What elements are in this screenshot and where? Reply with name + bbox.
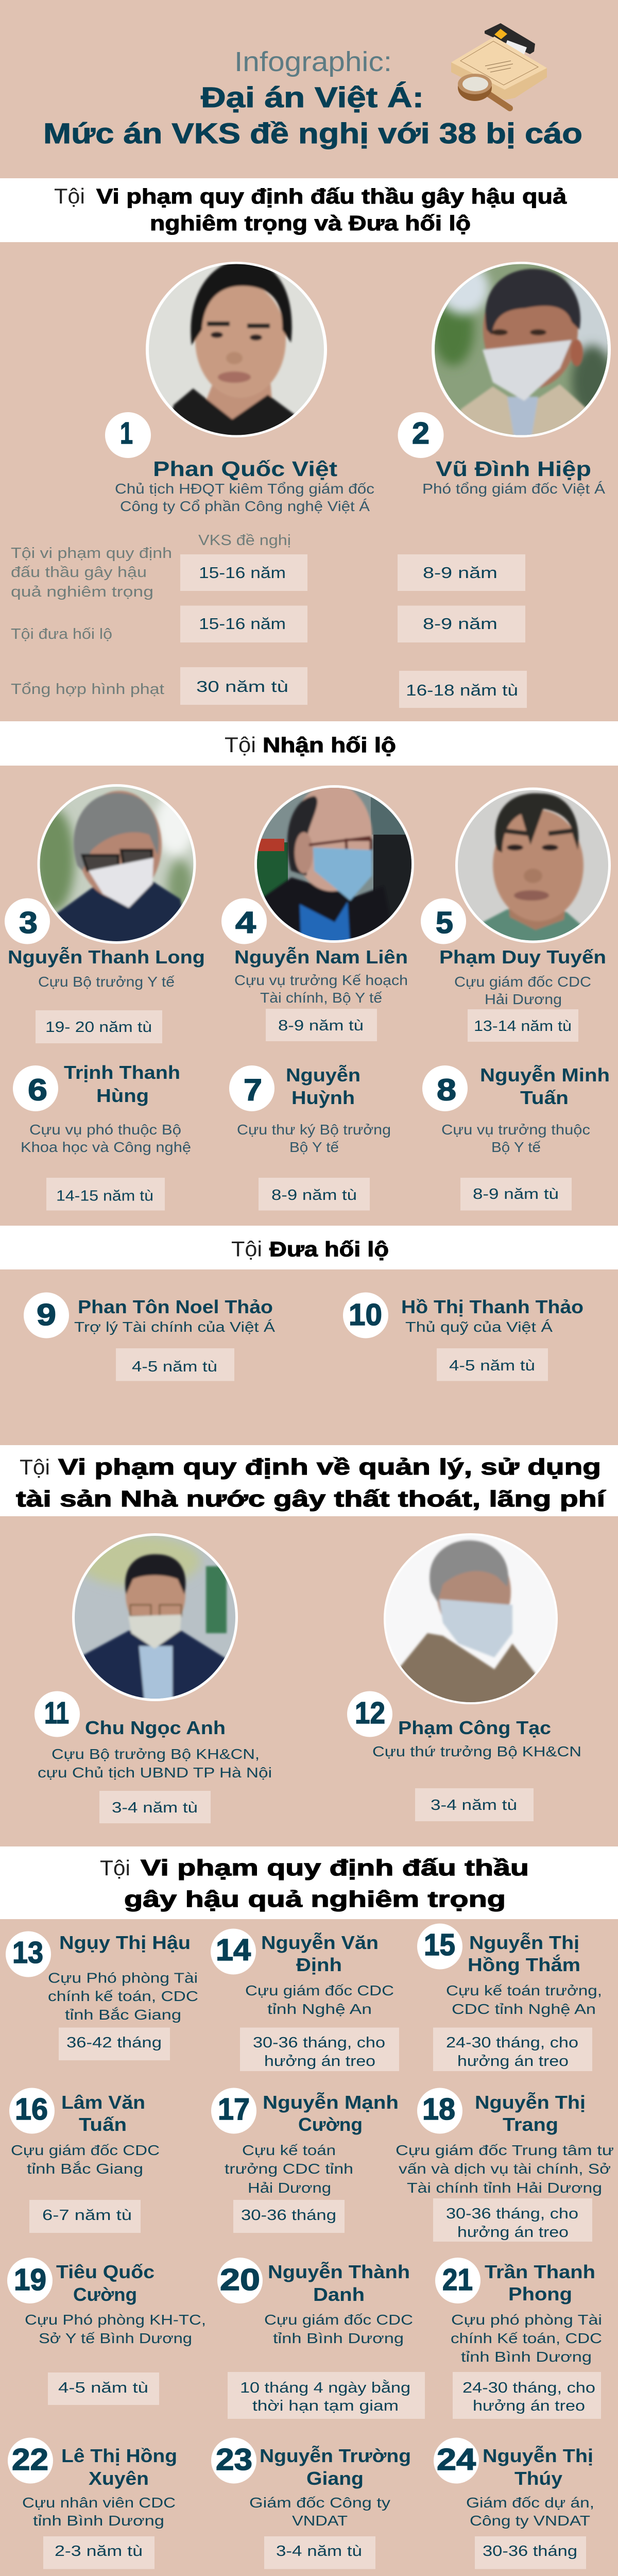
- section heading band: [0, 721, 618, 766]
- name: [61, 2445, 177, 2489]
- sentence box: [453, 2372, 601, 2419]
- section 5: bidding violation causing serious consequences: [0, 1846, 618, 2576]
- defendant 19: [7, 2258, 206, 2405]
- number badge 5: 5: [436, 906, 453, 940]
- number badge 8: [422, 1065, 468, 1111]
- name: [286, 1064, 360, 1108]
- sentence box: 4-5 năm tù: [449, 1358, 535, 1374]
- name: Danh: [313, 2284, 365, 2305]
- role: tỉnh Bình Dương: [273, 2330, 404, 2346]
- role: [446, 1982, 602, 2017]
- name: Hồ Thị Thanh Thảo: [401, 1296, 583, 1317]
- sentence box: 13-14 năm tù: [474, 1018, 572, 1035]
- number badge 8: 8: [437, 1073, 456, 1107]
- defendant 13: [6, 1931, 198, 2060]
- number badge 10: 10: [349, 1298, 382, 1332]
- number badge 15: [417, 1924, 462, 1969]
- section 4: state asset management violation: [0, 1445, 618, 1823]
- name: Trịnh Thanh: [64, 1062, 180, 1083]
- role: [21, 1122, 191, 1155]
- name: Tiêu Quốc: [56, 2261, 154, 2282]
- name: Ngụy Thị Hậu: [59, 1932, 191, 1953]
- row label: bidding violation: [11, 545, 172, 600]
- section heading band: [0, 1226, 618, 1269]
- section heading band: nghiêm trọng và Đưa hối lộ: [150, 211, 471, 235]
- role: Giám đốc Công ty: [249, 2495, 390, 2511]
- sentence box: [433, 2028, 592, 2071]
- number badge 13: 13: [12, 1936, 43, 1970]
- sentence box: [59, 2028, 170, 2060]
- name: [56, 2261, 154, 2305]
- defendant 5: [421, 787, 611, 1042]
- role: Công ty VNDAT: [470, 2513, 590, 2529]
- name: Vũ Đình Hiệp: [436, 457, 591, 481]
- sentence box: [43, 2536, 154, 2569]
- role: trưởng CDC tỉnh: [225, 2161, 353, 2177]
- role: tỉnh Nghệ An: [267, 2001, 372, 2017]
- name: Tuấn: [520, 1087, 569, 1108]
- defendant 17: [211, 2088, 399, 2233]
- defendant 8: [422, 1064, 610, 1211]
- name: Phong: [508, 2283, 572, 2304]
- section heading band: gây hậu quả nghiêm trọng: [124, 1887, 506, 1912]
- name: Thúy: [514, 2468, 562, 2489]
- number badge 16: [9, 2088, 55, 2134]
- role: cựu Chủ tịch UBND TP Hà Nội: [38, 1765, 272, 1781]
- role: [264, 2312, 413, 2346]
- sentence box: [399, 671, 527, 708]
- sentence box: 3-4 năm tù: [112, 1800, 198, 1816]
- role: [25, 2312, 206, 2346]
- number badge 21: [435, 2258, 480, 2303]
- number badge 21: 21: [442, 2263, 473, 2297]
- role: [396, 2142, 614, 2196]
- photo: Nguyễn Nam Liên: [254, 783, 415, 948]
- role: vấn và dịch vụ tài chính, Sở: [399, 2161, 611, 2177]
- defendant 22: [8, 2438, 177, 2569]
- sentence box: [264, 2536, 375, 2569]
- defendant 12: [347, 1533, 581, 1821]
- defendant 10: [343, 1292, 583, 1381]
- role: [48, 1970, 198, 2023]
- name: Phan Tôn Noel Thảo: [78, 1296, 273, 1317]
- number badge 12: 12: [355, 1696, 385, 1730]
- name: Tuấn: [79, 2114, 127, 2135]
- role: [441, 1122, 590, 1155]
- sentence box: 24-30 tháng, cho: [462, 2380, 595, 2396]
- defendant 15: [417, 1924, 602, 2071]
- name: Nguyễn Nam Liên: [234, 946, 408, 968]
- role: Bộ Y tế: [289, 1139, 339, 1155]
- role: Cựu giám đốc CDC: [264, 2312, 413, 2328]
- sentence box: [259, 1178, 370, 1211]
- name: Huỳnh: [291, 1087, 355, 1108]
- number badge 14: [211, 1929, 256, 1974]
- sentence box: 3-4 năm tù: [431, 1797, 517, 1814]
- role: Chủ tịch HĐQT kiêm Tổng giám đốc: [115, 481, 374, 497]
- title: Mức án VKS đề nghị với 38 bị cáo: [43, 117, 582, 149]
- sentence box: hưởng án treo: [473, 2398, 585, 2414]
- name: Phạm Duy Tuyến: [439, 946, 606, 968]
- role: Cựu giám đốc Trung tâm tư: [396, 2142, 614, 2158]
- sentence box: [29, 2200, 141, 2233]
- sentence box: [48, 2372, 159, 2405]
- role: Cựu giám đốc CDC: [454, 974, 591, 990]
- role: Cựu vụ trưởng thuộc: [441, 1122, 590, 1138]
- number badge 3: [5, 899, 50, 944]
- sentence box: [437, 1348, 548, 1381]
- defendant 24: [434, 2438, 594, 2569]
- row label: giving bribes: Tội đưa hối lộ: [11, 626, 112, 642]
- name: Nguyễn Thanh Long: [8, 946, 205, 968]
- number badge 11: 11: [44, 1696, 69, 1730]
- section heading band: Tội: [20, 1455, 50, 1479]
- sentence box: [99, 1791, 211, 1823]
- defendant 20: [217, 2258, 425, 2419]
- role: Cựu kế toán trưởng,: [446, 1982, 602, 1998]
- role: chính kế toán, CDC: [48, 1988, 198, 2004]
- number badge 18: 18: [422, 2092, 455, 2126]
- sentence box: 14-15 năm tù: [56, 1188, 153, 1205]
- section heading band: Đưa hối lộ: [269, 1238, 389, 1261]
- defendant 9: [24, 1292, 275, 1381]
- sentence box: 8-9 năm tù: [271, 1187, 357, 1204]
- sentence box: 4-5 năm tù: [58, 2380, 148, 2396]
- sentence box: hưởng án treo: [264, 2053, 375, 2070]
- row label: bidding violation: Tội vi phạm quy định: [11, 545, 172, 562]
- photo: Phạm Duy Tuyến: [455, 787, 611, 948]
- number badge 4: [221, 899, 267, 944]
- name: Lê Thị Hồng: [61, 2445, 177, 2466]
- sentence box: 10 tháng 4 ngày bằng: [240, 2379, 410, 2396]
- number badge 1: 1: [120, 416, 133, 450]
- role: Cựu giám đốc CDC: [245, 1982, 394, 1998]
- number badge 3: 3: [19, 906, 38, 940]
- section heading band: tài sản Nhà nước gây thất thoát, lãng phí: [16, 1486, 606, 1512]
- name: [61, 2092, 145, 2135]
- role: Cựu Bộ trưởng Bộ KH&CN,: [52, 1746, 260, 1762]
- defendant 7: [229, 1064, 391, 1211]
- name: Cường: [298, 2114, 363, 2135]
- defendant 11: [35, 1533, 272, 1823]
- sentence box: 30-36 tháng: [483, 2543, 577, 2560]
- sentence box: [460, 1178, 572, 1211]
- role: [115, 481, 374, 514]
- role: Trợ lý Tài chính của Việt Á: [74, 1319, 275, 1335]
- role: Tài chính, Bộ Y tế: [260, 990, 382, 1006]
- number badge 15: 15: [424, 1928, 455, 1962]
- role: [225, 2142, 353, 2196]
- name: Phan Quốc Việt: [153, 457, 337, 481]
- section heading band: Vi phạm quy định đấu thầu: [141, 1855, 529, 1880]
- section heading band: Tội: [54, 184, 85, 208]
- sentence box: 16-18 năm tù: [406, 681, 518, 699]
- sentence box: 8-9 năm tù: [473, 1186, 559, 1202]
- section heading band: Nhận hối lộ: [263, 733, 396, 757]
- number badge 10: [343, 1292, 388, 1338]
- sentence box: thời hạn tạm giam: [252, 2398, 399, 2414]
- sentence box: 8-9 năm: [423, 564, 497, 582]
- defendant 2: [398, 252, 618, 497]
- role: Công ty Cổ phần Công nghệ Việt Á: [120, 498, 370, 514]
- role: [451, 2312, 602, 2365]
- role: Sở Y tế Bình Dương: [39, 2330, 192, 2346]
- role: [249, 2495, 390, 2529]
- sentence box: 30-36 tháng, cho: [446, 2206, 578, 2222]
- name: Lâm Văn: [61, 2092, 145, 2113]
- role: Cựu giám đốc CDC: [11, 2142, 160, 2158]
- role: Cựu kế toán: [242, 2142, 336, 2158]
- section 3: giving bribes: [0, 1226, 618, 1381]
- role: CDC tỉnh Nghệ An: [452, 2001, 596, 2017]
- name: Phạm Công Tạc: [398, 1717, 551, 1738]
- role: Cựu vụ trưởng Kế hoạch: [234, 972, 408, 988]
- number badge 22: [8, 2438, 53, 2483]
- title: [43, 81, 582, 149]
- sentence box: 30-36 tháng, cho: [253, 2035, 385, 2051]
- section heading band: [0, 1846, 618, 1919]
- number badge 4: 4: [235, 906, 256, 940]
- role: Cựu thứ trưởng Bộ KH&CN: [372, 1743, 581, 1759]
- name: Xuyên: [89, 2468, 149, 2489]
- name: [263, 2092, 399, 2135]
- role: Khoa học và Công nghệ: [21, 1139, 191, 1155]
- title: Đại án Việt Á:: [201, 81, 424, 113]
- defendant 18: [396, 2088, 614, 2242]
- sentence box: 19- 20 năm tù: [45, 1019, 152, 1036]
- photo: Vũ Đình Hiệp: [432, 262, 611, 437]
- section heading band: Tội: [100, 1856, 130, 1880]
- role: [245, 1982, 394, 2017]
- sentence box: hưởng án treo: [457, 2224, 569, 2241]
- name: Hồng Thắm: [468, 1954, 580, 1975]
- name: Nguyễn Mạnh: [263, 2092, 399, 2113]
- number badge 19: 19: [14, 2263, 46, 2297]
- number badge 6: 6: [28, 1073, 47, 1107]
- defendant 4: [221, 783, 415, 1041]
- number badge 9: 9: [37, 1298, 56, 1332]
- name: Hùng: [96, 1085, 149, 1106]
- role: [234, 972, 408, 1006]
- name: Trang: [503, 2114, 558, 2135]
- name: Cường: [73, 2284, 137, 2305]
- name: [261, 1932, 379, 1975]
- role: chính Kế toán, CDC: [451, 2330, 602, 2346]
- photo: Nguyễn Thanh Long: [33, 784, 196, 948]
- number badge 12: [347, 1691, 392, 1737]
- number badge 18: [417, 2088, 462, 2134]
- number badge 6: [13, 1065, 58, 1111]
- sentence box: [116, 1348, 234, 1381]
- sentence box: [228, 2372, 425, 2419]
- section heading band: Tội: [231, 1236, 262, 1261]
- number badge 20: 20: [220, 2263, 260, 2297]
- role: Cựu Phó phòng KH-TC,: [25, 2312, 206, 2328]
- photo: Phan Quốc Việt: [146, 260, 327, 443]
- section heading band: [0, 178, 618, 242]
- number badge 17: 17: [218, 2092, 250, 2126]
- name: Nguyễn Minh: [480, 1064, 610, 1086]
- section heading band: Tội: [225, 733, 256, 757]
- name: Định: [296, 1954, 342, 1975]
- sentence box: 15-16 năm: [199, 564, 286, 582]
- sentence box: [36, 1010, 162, 1043]
- defendant 21: [435, 2258, 602, 2419]
- section 1: bidding violation and bribery: [0, 178, 618, 708]
- section 2: receiving bribes: [0, 721, 618, 1211]
- number badge 19: [7, 2258, 53, 2303]
- role: tỉnh Bắc Giang: [65, 2007, 181, 2023]
- name: Nguyễn Văn: [261, 1932, 379, 1953]
- sentence box: 36-42 tháng: [66, 2035, 162, 2051]
- sentence box: 4-5 năm tù: [132, 1359, 217, 1375]
- role: Hải Dương: [248, 2180, 331, 2196]
- role: [466, 2495, 594, 2529]
- sentence box: 24-30 tháng, cho: [446, 2035, 578, 2051]
- role: Cựu vụ phó thuộc Bộ: [29, 1122, 181, 1138]
- name: Nguyễn: [286, 1064, 360, 1086]
- name: Trần Thanh: [485, 2261, 595, 2282]
- defendant 1: [105, 260, 374, 514]
- number badge 14: 14: [216, 1933, 251, 1967]
- sentence box: 30-36 tháng: [241, 2207, 336, 2224]
- name: Nguyễn Trường: [260, 2445, 411, 2466]
- sentence box: hưởng án treo: [457, 2053, 569, 2070]
- name: Nguyễn Thành: [268, 2261, 410, 2282]
- role: tỉnh Bình Dương: [33, 2513, 164, 2529]
- number badge 11: [35, 1691, 80, 1737]
- number badge 7: [229, 1065, 274, 1111]
- name: Nguyễn Thị: [475, 2092, 586, 2113]
- name: [268, 2261, 410, 2305]
- sentence box: [180, 554, 307, 591]
- role: Cựu thư ký Bộ trưởng: [237, 1122, 391, 1138]
- role: [38, 1746, 272, 1781]
- icon: documents and magnifier: [451, 23, 547, 108]
- sentence box: [415, 1788, 534, 1821]
- defendant 3: [5, 784, 205, 1043]
- sentence box: 30 năm tù: [196, 677, 288, 696]
- role: Giám đốc dự án,: [466, 2495, 594, 2511]
- defendant 14: [211, 1929, 399, 2071]
- role: Thủ quỹ của Việt Á: [405, 1319, 553, 1335]
- sentence box: [398, 554, 525, 591]
- sentence box: 15-16 năm: [199, 615, 286, 633]
- number badge 24: 24: [437, 2443, 476, 2477]
- number badge 23: 23: [216, 2443, 252, 2477]
- role: [22, 2495, 176, 2529]
- sentence box: [468, 1009, 578, 1042]
- section heading band: [0, 1445, 618, 1516]
- name: [485, 2261, 595, 2304]
- name: [260, 2445, 411, 2489]
- number badge 9: [24, 1292, 69, 1338]
- sentence box: [240, 2028, 399, 2071]
- sentence box: [398, 606, 525, 642]
- number badge 13: [6, 1931, 51, 1977]
- sentence box: [180, 667, 307, 705]
- number badge 24: [434, 2438, 479, 2483]
- number badge 7: 7: [244, 1073, 262, 1107]
- name: [480, 1064, 610, 1108]
- number badge 22: 22: [12, 2443, 48, 2477]
- sentence box: 2-3 năm tù: [55, 2543, 143, 2560]
- role: Phó tổng giám đốc Việt Á: [422, 481, 605, 497]
- role: VNDAT: [292, 2513, 348, 2529]
- sentence box: [433, 2198, 592, 2242]
- sentence box: 8-9 năm: [423, 615, 497, 633]
- label: Infographic: Infographic:: [234, 46, 392, 77]
- sentence box: [475, 2536, 586, 2569]
- name: Nguyễn Thị: [469, 1932, 579, 1953]
- defendant 23: [211, 2438, 411, 2569]
- defendant 16: [9, 2088, 160, 2233]
- number badge 2: [398, 412, 444, 458]
- sentence box: 3-4 năm tù: [276, 2543, 362, 2560]
- role: tỉnh Bắc Giang: [27, 2161, 143, 2177]
- role: Cựu nhân viên CDC: [22, 2495, 176, 2511]
- role: Cựu Bộ trưởng Y tế: [38, 974, 175, 990]
- sentence box: 8-9 năm tù: [278, 1018, 364, 1034]
- role: Tài chính tỉnh Hải Dương: [407, 2180, 602, 2196]
- name: [64, 1062, 180, 1106]
- section heading band: Vi phạm quy định đấu thầu gây hậu quả: [96, 184, 567, 208]
- column label: VKS đề nghị: [198, 532, 291, 549]
- number badge 16: 16: [15, 2092, 48, 2126]
- number badge 17: [211, 2088, 256, 2134]
- role: Cựu phó phòng Tài: [451, 2312, 602, 2328]
- name: [468, 1932, 580, 1975]
- header panel: [43, 23, 582, 149]
- row label: bidding violation: đấu thầu gây hậu: [11, 564, 147, 581]
- role: Bộ Y tế: [491, 1139, 541, 1155]
- sentence box: [180, 606, 307, 642]
- role: Cựu Phó phòng Tài: [48, 1970, 198, 1986]
- photo: Phạm Công Tạc: [384, 1533, 558, 1710]
- defendant 6: [13, 1062, 191, 1211]
- number badge 5: [421, 899, 466, 944]
- sentence box: [233, 2200, 345, 2233]
- number badge 1: [105, 412, 151, 458]
- name: Chu Ngọc Anh: [85, 1717, 226, 1738]
- section heading band: Vi phạm quy định về quản lý, sử dụng: [58, 1454, 601, 1480]
- role: [454, 974, 591, 1007]
- role: Hải Dương: [485, 991, 562, 1007]
- name: [475, 2092, 586, 2135]
- sentence box: [46, 1178, 165, 1211]
- row label: bidding violation: quả nghiêm trọng: [11, 584, 153, 600]
- sentence box: 6-7 năm tù: [42, 2207, 132, 2224]
- name: [483, 2445, 593, 2489]
- role: [237, 1122, 391, 1155]
- name: Nguyễn Thị: [483, 2445, 593, 2466]
- name: Giang: [306, 2468, 364, 2489]
- number badge 23: [211, 2438, 256, 2483]
- sentence box: [266, 1009, 377, 1041]
- photo: Chu Ngọc Anh: [72, 1533, 238, 1705]
- role: [11, 2142, 160, 2177]
- role: tỉnh Bình Dương: [461, 2349, 592, 2365]
- number badge 2: 2: [412, 416, 430, 450]
- row label: total: Tổng hợp hình phạt: [11, 681, 164, 698]
- number badge 20: [217, 2258, 263, 2303]
